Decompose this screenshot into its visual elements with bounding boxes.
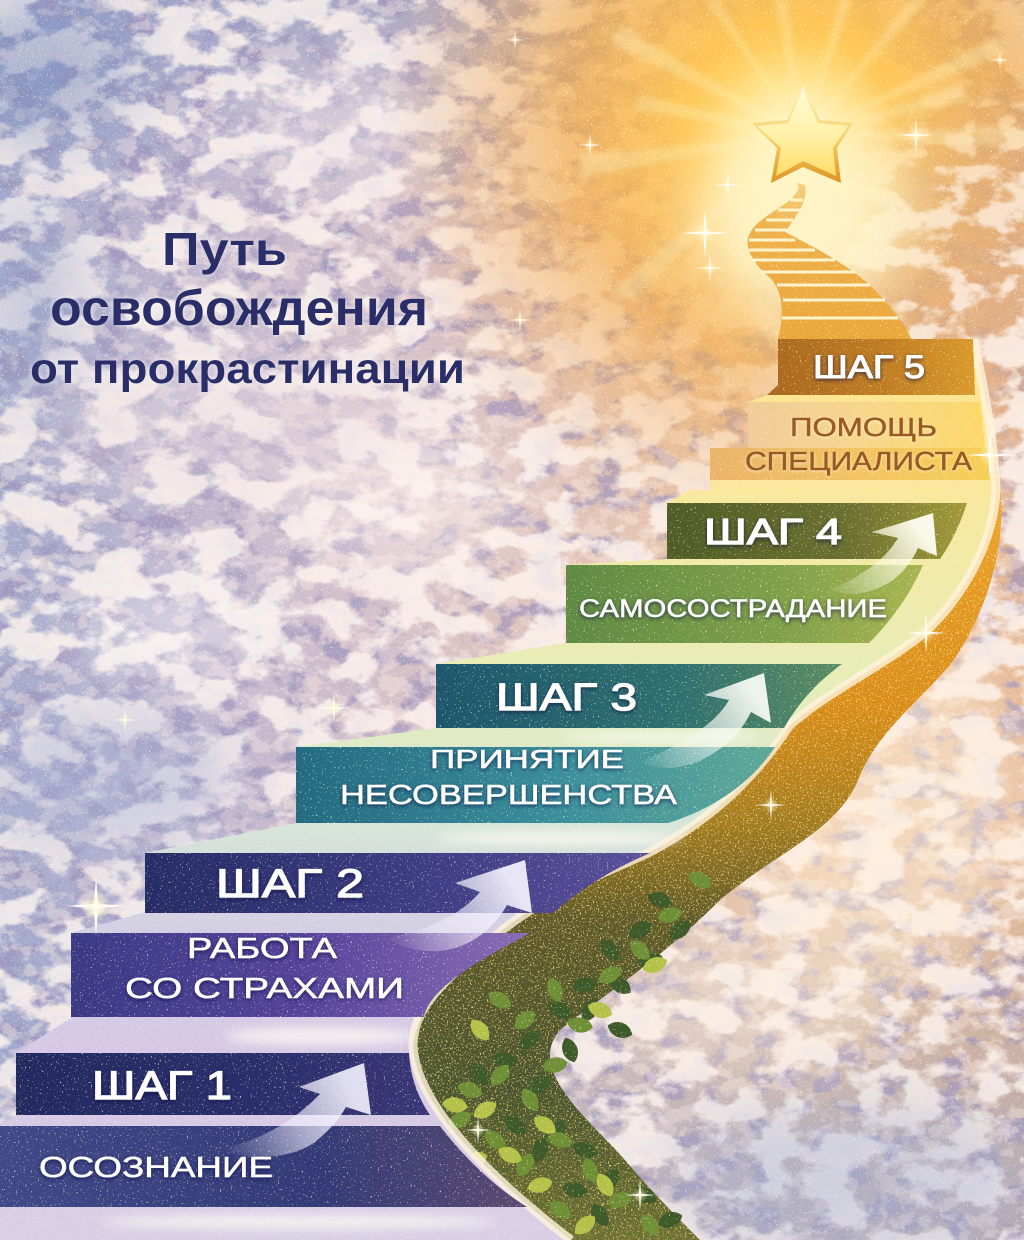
label: step 4: ШАГ 4	[704, 511, 842, 552]
arrow: step 3	[640, 673, 771, 768]
step face: ШАГ 1	[16, 1053, 430, 1115]
step face: СПЕЦИАЛИСТА	[710, 448, 990, 480]
step face: РАБОТА	[71, 933, 530, 1017]
title: Путь	[162, 223, 287, 275]
step face: ПОМОЩЬ	[748, 402, 985, 448]
label: step 3: ПРИНЯТИЕ	[430, 744, 624, 774]
step face: ОСОЗНАНИЕ	[0, 1126, 527, 1207]
star	[708, 45, 898, 235]
golden sun glow	[397, 0, 1024, 530]
step labels	[39, 349, 973, 1184]
step face: ШАГ 5	[767, 339, 975, 395]
tread highlights	[100, 732, 760, 1229]
arrow: step 1	[215, 1063, 371, 1157]
golden and leafy band under the staircase	[400, 460, 1024, 1240]
bright glowing side rail	[413, 339, 996, 1240]
label: step 5	[745, 349, 973, 476]
step face: ШАГ 4	[667, 503, 967, 559]
label: step 3: ШАГ 3	[496, 677, 637, 719]
label: step 1	[39, 1064, 273, 1184]
label: step 1: ОСОЗНАНИЕ	[39, 1152, 273, 1184]
step face: ШАГ 3	[436, 664, 842, 728]
label: step 2: СО СТРАХАМИ	[125, 973, 404, 1005]
label: step 3: НЕСОВЕРШЕНСТВА	[340, 779, 677, 810]
step face: САМОСОСТРАДАНИЕ	[566, 565, 923, 643]
label: step 5: ПОМОЩЬ	[790, 412, 937, 442]
title: от прокрастинации	[30, 345, 465, 393]
label: step 2: РАБОТА	[187, 933, 338, 965]
title	[30, 223, 465, 393]
label: step 1: ШАГ 1	[92, 1064, 232, 1108]
arrow: step 4	[828, 513, 937, 594]
narrow winding stairs to the star	[747, 183, 912, 340]
label: step 4	[579, 511, 887, 623]
climbing vine with leaves	[441, 867, 715, 1240]
label: step 2: ШАГ 2	[216, 862, 364, 906]
label: step 4: САМОСОСТРАДАНИЕ	[579, 595, 887, 623]
step face: ПРИНЯТИЕ	[296, 747, 775, 823]
title: освобождения	[50, 280, 428, 336]
arrow: step 2	[385, 860, 532, 951]
label: step 3	[340, 677, 677, 810]
label: step 5: СПЕЦИАЛИСТА	[745, 446, 973, 476]
light rays from the star	[580, 0, 1024, 300]
step face: ШАГ 2	[145, 853, 650, 913]
label: step 2	[125, 862, 404, 1005]
stair treads	[0, 339, 996, 1240]
label: step 5: ШАГ 5	[813, 349, 925, 385]
peach cloud bank right of the stairs	[755, 84, 1024, 530]
